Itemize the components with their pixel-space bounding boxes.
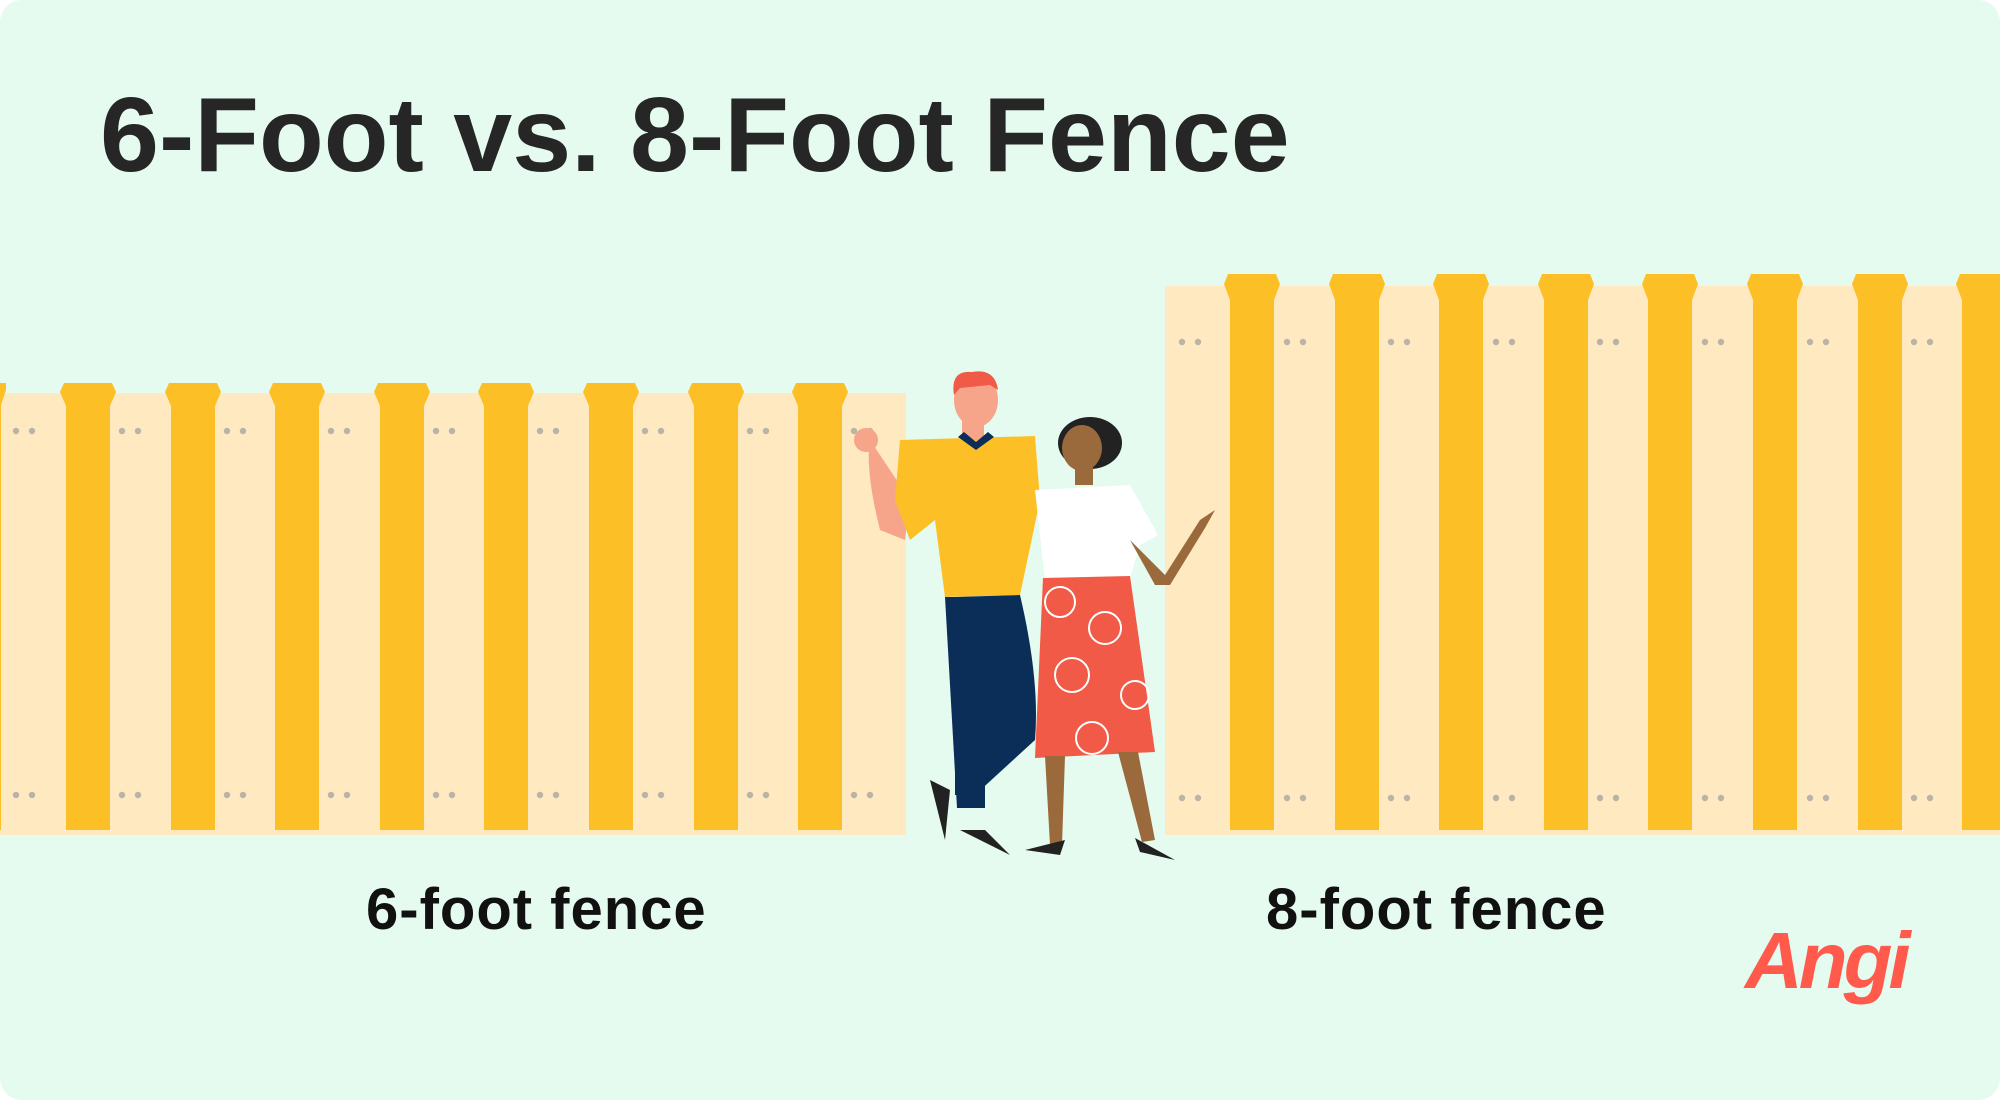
label: 6-foot fence: 6-foot fence bbox=[366, 877, 707, 942]
woman bbox=[1025, 417, 1215, 860]
right fence: 8-foot bbox=[1165, 274, 2000, 835]
people: couple bbox=[854, 371, 1215, 860]
title: 6-Foot vs. 8-Foot Fence bbox=[100, 76, 1290, 194]
label: 8-foot fence: 8-foot fence bbox=[1266, 877, 1607, 942]
logo: Angi: Angi bbox=[1745, 916, 1907, 1005]
man bbox=[854, 371, 1040, 855]
left fence: 6-foot bbox=[0, 383, 906, 835]
